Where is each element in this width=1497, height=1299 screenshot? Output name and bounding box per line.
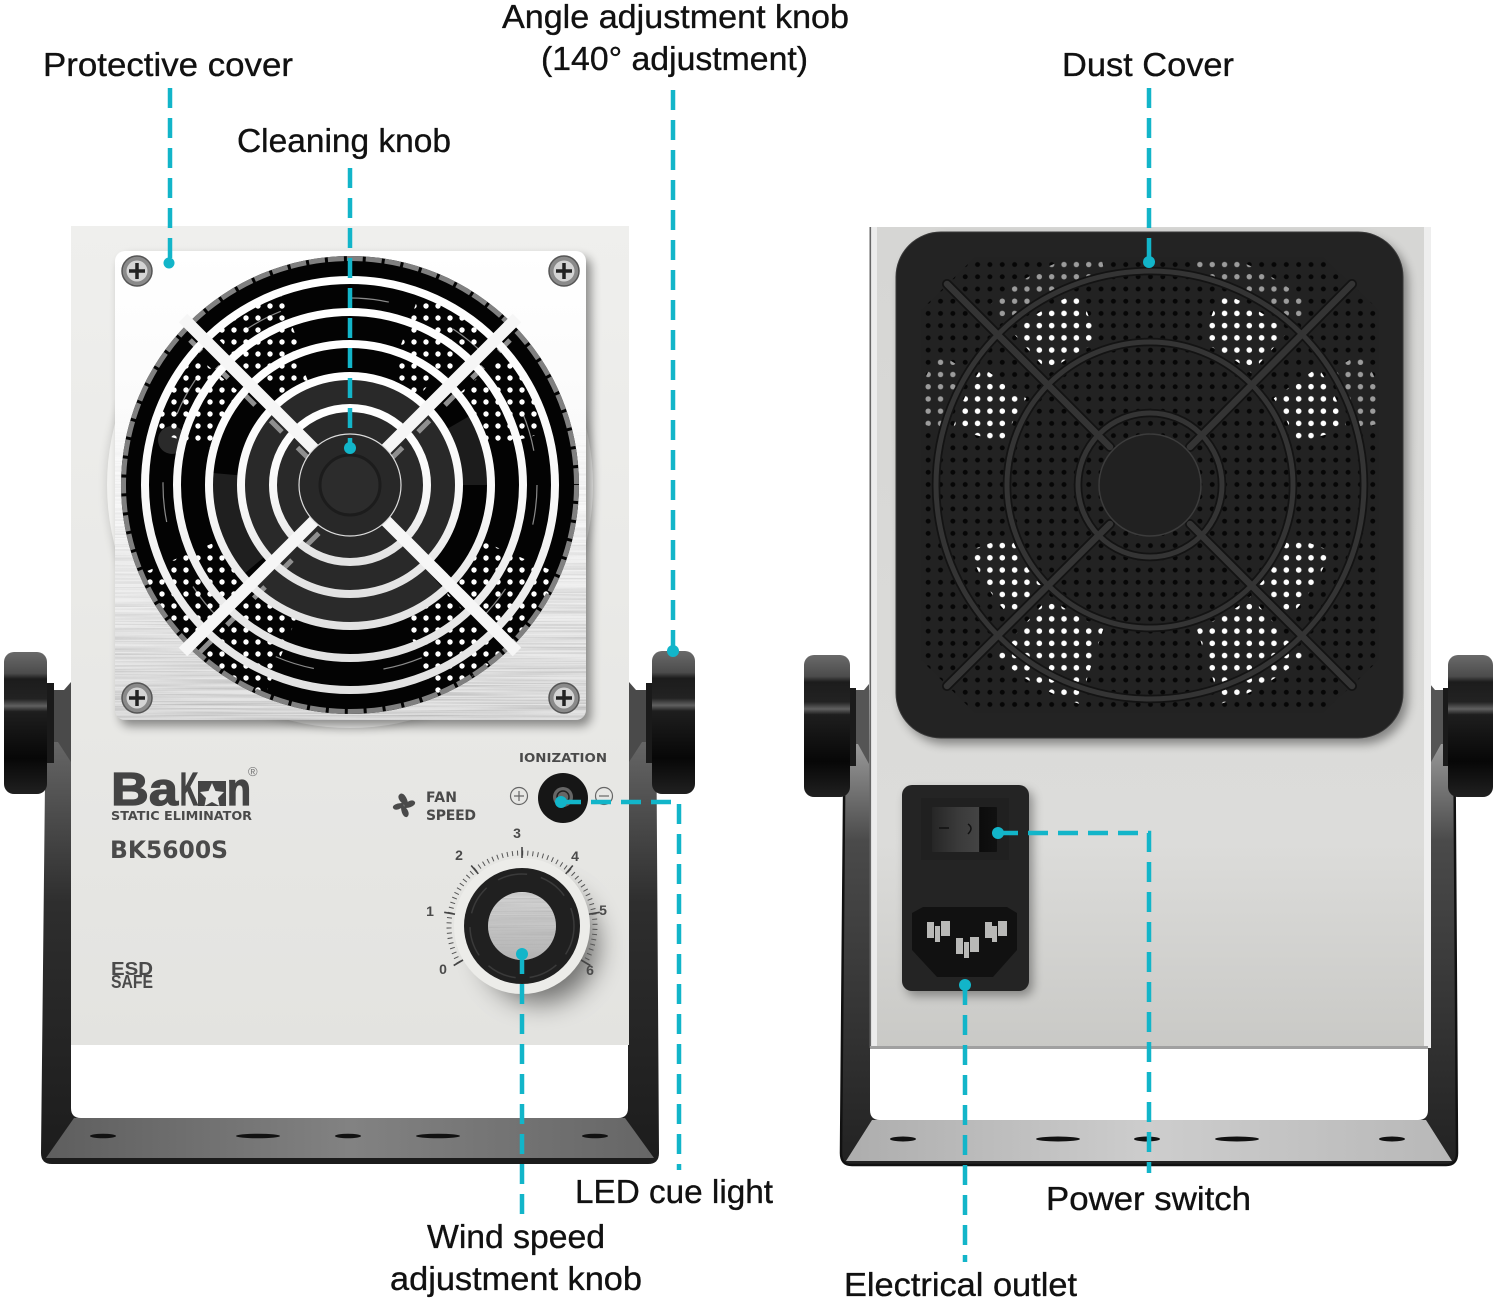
center hub xyxy=(1099,434,1201,536)
brushed texture xyxy=(115,251,586,720)
rocker switch xyxy=(921,798,1009,860)
housing front face xyxy=(71,226,629,1045)
product subtitle: STATIC ELIMINATOR xyxy=(111,808,252,823)
label: protective cover: Protective cover xyxy=(43,46,293,83)
icon: fan xyxy=(393,794,415,817)
label: LED cue light: LED cue light xyxy=(575,1173,773,1210)
label: angle adjustment knob xyxy=(502,0,849,77)
label: wind speed adjustment knob: adjustment knob xyxy=(390,1260,642,1297)
perforated dots seen through grille xyxy=(165,300,535,670)
housing rear face xyxy=(870,227,1431,1049)
callout: wind speed knob line xyxy=(516,948,528,1215)
light showing through holes xyxy=(918,253,1382,717)
angle knob left xyxy=(4,652,71,794)
angle knob rear left xyxy=(804,655,869,797)
ESD safe mark xyxy=(111,959,153,992)
brand logo: n xyxy=(227,763,251,815)
protective cover plate and fan grille xyxy=(107,242,593,728)
callout: cleaning knob line xyxy=(344,168,356,454)
brand logo: K xyxy=(180,763,198,815)
wind speed dial with scale: 2 xyxy=(455,847,463,863)
callout: dust cover line xyxy=(1143,88,1155,268)
panel: front view of static eliminator xyxy=(4,226,695,1164)
label: angle adjustment knob: (140° adjustment) xyxy=(541,40,808,77)
model number: BK5600S xyxy=(110,836,228,864)
brand logo: ® xyxy=(248,764,258,779)
wind speed dial with scale: 5 xyxy=(599,902,607,918)
label: dust cover: Dust Cover xyxy=(1062,46,1234,83)
wind speed dial with scale: 3 xyxy=(513,825,521,841)
shaded strut edges xyxy=(190,340,510,652)
perforated mesh xyxy=(921,257,1379,713)
wind speed dial with scale: 1 xyxy=(426,903,434,919)
fan speed label xyxy=(426,790,476,824)
label: power switch: Power switch xyxy=(1046,1180,1251,1217)
dust cover xyxy=(896,232,1408,744)
panel: rear view of static eliminator xyxy=(804,227,1493,1165)
power module xyxy=(902,785,1033,996)
angle knob right xyxy=(629,651,695,794)
wind speed dial with scale: 6 xyxy=(586,962,594,978)
callout: electrical outlet line xyxy=(959,979,971,1262)
callout: angle knob line xyxy=(667,90,679,657)
raised guard rings and spokes xyxy=(936,271,1364,699)
wind speed dial with scale: 4 xyxy=(571,848,579,864)
callout: power switch line xyxy=(992,827,1149,1173)
wind speed dial with scale: 0 xyxy=(439,961,447,977)
label: wind speed adjustment knob: Wind speed xyxy=(427,1218,605,1255)
ESD safe mark: SAFE xyxy=(111,972,153,992)
power inlet socket xyxy=(912,907,1017,977)
fan speed label: FAN xyxy=(426,790,457,806)
fan interior xyxy=(121,256,579,714)
callout: protective cover line xyxy=(164,88,174,268)
callout: LED cue light line xyxy=(555,796,679,1170)
angle knob rear right xyxy=(1430,655,1493,797)
ionization label: IONIZATION xyxy=(519,750,607,765)
wind speed dial with scale xyxy=(426,825,607,1003)
ESD safe mark: ESD xyxy=(111,959,153,979)
white grille struts xyxy=(183,318,517,652)
label: wind speed adjustment knob xyxy=(390,1218,642,1297)
ionization trimmer and plus minus icons xyxy=(510,773,612,823)
center cleaning knob hub xyxy=(299,434,401,536)
cover screws xyxy=(122,256,579,713)
brand logo xyxy=(111,763,258,815)
fan speed label: SPEED xyxy=(426,808,476,824)
brand logo: Ba xyxy=(111,763,178,815)
stand bracket front xyxy=(41,690,659,1164)
stand bracket rear xyxy=(841,690,1457,1165)
white grille rings xyxy=(145,280,555,690)
label: cleaning knob: Cleaning knob xyxy=(237,122,451,159)
